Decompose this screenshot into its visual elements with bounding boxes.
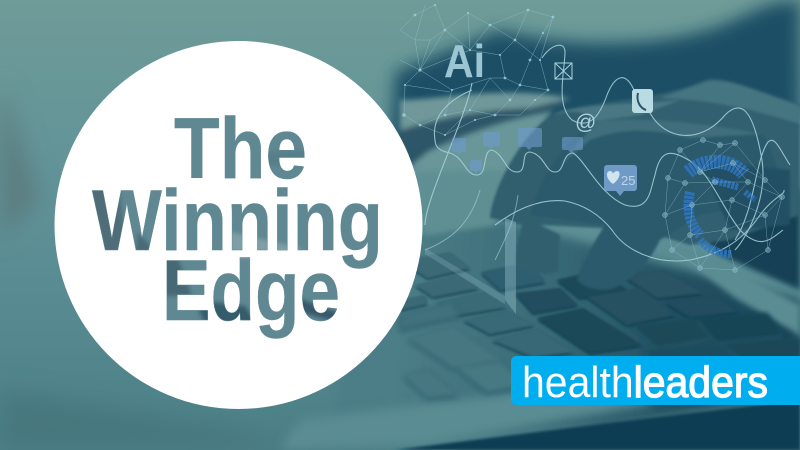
title: The Winning Edge: Edge: [162, 243, 340, 339]
dark upper right background: [390, 0, 800, 150]
title: The Winning Edge: [92, 101, 383, 339]
keyboard deck: [330, 220, 800, 445]
blurred desk and left edge: [0, 80, 300, 450]
white circle badge: [54, 41, 422, 409]
icon: at sign: @: [575, 111, 596, 134]
light band right of keyboard: [665, 245, 800, 335]
keyboard keys, upper sharp row: [400, 252, 737, 357]
translucent bar chart panel over keyboard: [425, 190, 518, 314]
icon: like bubbles: [452, 128, 583, 174]
icon: envelope: [555, 63, 572, 79]
middle finger: [530, 121, 790, 290]
title: The Winning Edge: Winning: [92, 173, 383, 269]
icon: heart 25 bubble: 25: [621, 173, 635, 188]
keyboard keys, blurred rows: [400, 302, 800, 398]
icon: heart 25 bubble: [604, 165, 637, 196]
hand behind: left fingers: [400, 93, 570, 235]
Ai network nodes: [402, 4, 554, 136]
hand: knuckles and back of hand: [490, 79, 800, 290]
title: The Winning Edge: The: [174, 101, 307, 197]
dark bottom strip: [395, 400, 800, 450]
flowing data lines: [425, 45, 790, 261]
dark area right of hand: [690, 190, 800, 290]
icon: phone tile: [632, 89, 653, 113]
index finger: [490, 112, 596, 274]
Ai network: left polygon mesh: [400, 5, 553, 135]
laptop front lower lit edge: [280, 375, 650, 450]
Ai label: Ai: [444, 35, 485, 87]
globe network: [662, 138, 784, 272]
healthleaders logo bar: healthleaders: [522, 358, 768, 407]
